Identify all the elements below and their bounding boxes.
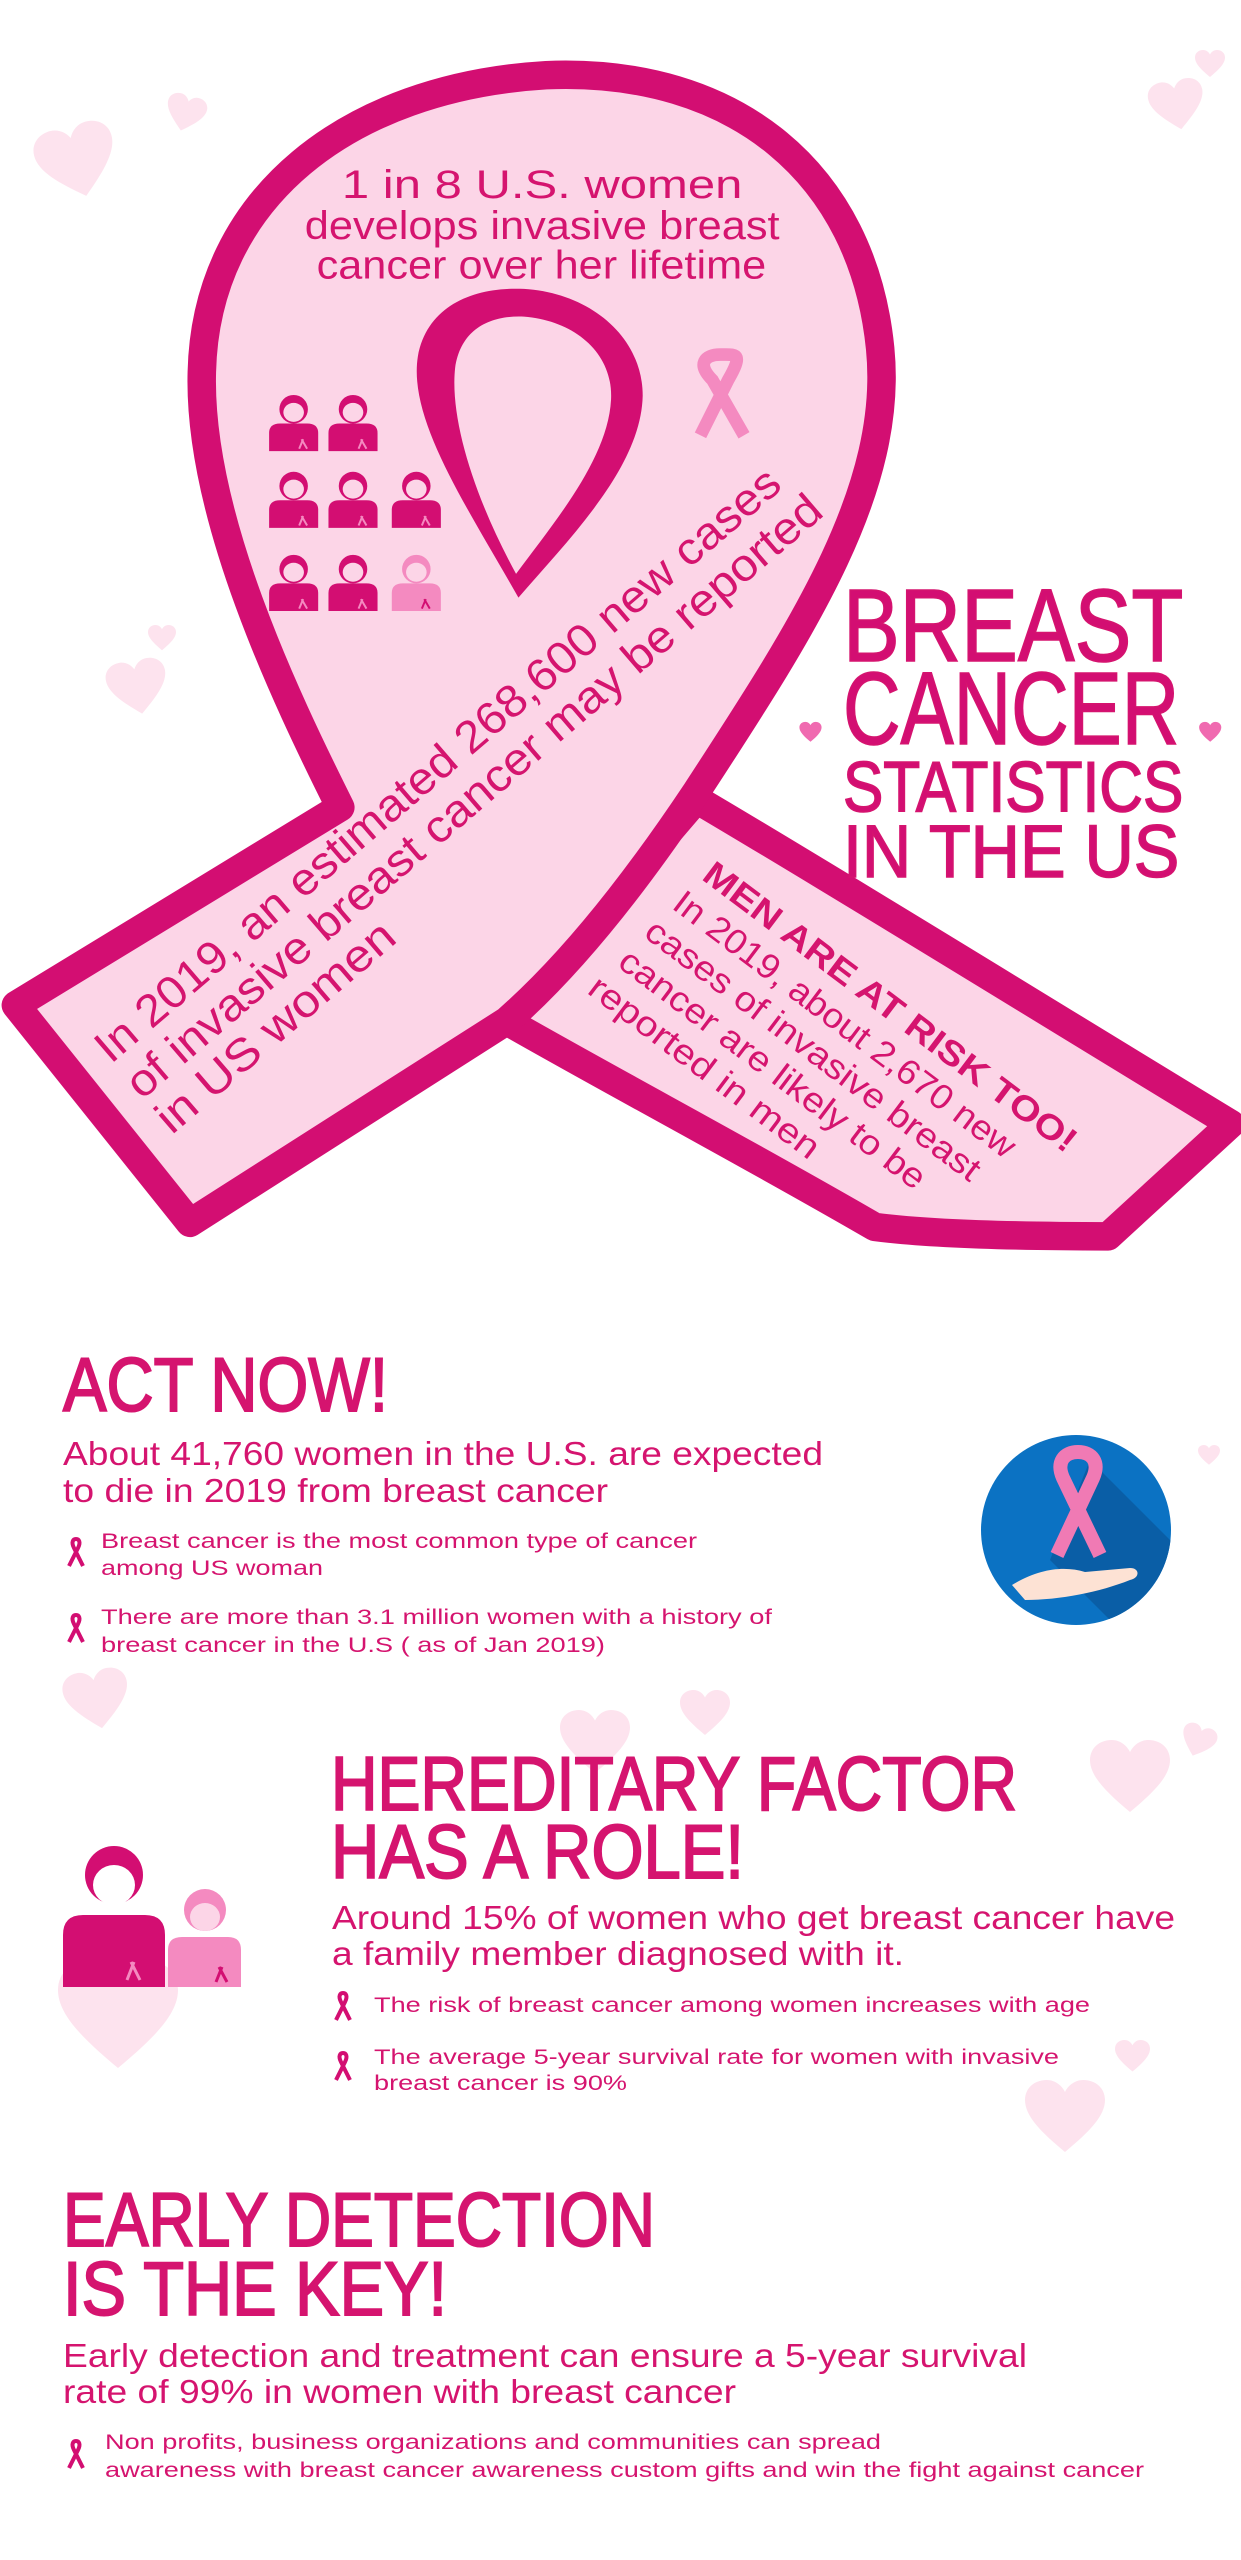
text: men are at risk too: MEN ARE AT RISK TOO!: [696, 854, 1084, 1160]
bullet: spread awareness: Non profits, business organizations and communities can spread: [105, 2431, 881, 2454]
heading: early detection: EARLY DETECTION: [63, 2178, 655, 2263]
ribbon: loop and left tail: [16, 75, 882, 1223]
title: [799, 568, 1221, 893]
ribbon infographic: [16, 75, 1231, 1288]
icon: hand holding ribbon: [981, 1435, 1171, 1625]
heading: early detection: IS THE KEY!: [63, 2247, 447, 2332]
bullet: 90% survival: The average 5-year survival rate for women with invasive: [374, 2046, 1059, 2069]
text: 268,600 new cases: In 2019, an estimated 268,600 new cases: [84, 457, 790, 1072]
bullet: 90% survival: [336, 2046, 1059, 2095]
bullet: risk increases with age: [336, 1993, 1090, 2020]
text: 41,760 women: to die in 2019 from breast cancer: [63, 1472, 608, 1509]
text: 99% survival: [63, 2337, 1027, 2410]
text: men are at risk too: In 2019, about 2,670 new: [666, 883, 1024, 1167]
bullet: 3.1 million: [69, 1606, 772, 1657]
background hearts: [29, 50, 1225, 2152]
bullet: most common type: Breast cancer is the most common type of cancer: [101, 1530, 697, 1553]
heading: early detection: [63, 2178, 655, 2332]
text: 41,760 women: [63, 1435, 823, 1509]
text: 15% of women: Around 15% of women who get breast cancer have: [332, 1899, 1175, 1936]
heading: act now: ACT NOW!: [63, 1343, 388, 1428]
heading: hereditary factor: [331, 1742, 1017, 1895]
text: 41,760 women: About 41,760 women in the U.S. are expected: [63, 1435, 823, 1472]
text: 15% of women: a family member diagnosed with it.: [332, 1935, 904, 1972]
title: STATISTICS: [843, 748, 1183, 827]
text: 268,600 new cases: of invasive breast cancer may be reported: [115, 483, 832, 1108]
ribbon: inner loop curve: [417, 289, 643, 598]
heading: hereditary factor: HEREDITARY FACTOR: [331, 1742, 1017, 1827]
bullet: 3.1 million: There are more than 3.1 million women with a history of: [101, 1606, 772, 1629]
bullet: risk increases with age: The risk of breast cancer among women increases with age: [374, 1994, 1090, 2017]
bullet: spread awareness: awareness with breast cancer awareness custom gifts and win the fight against cancer: [105, 2459, 1144, 2482]
text: 1 in 8 women: 1 in 8 U.S. women: [342, 163, 742, 207]
text: men are at risk too: [581, 840, 1084, 1288]
title: IN THE US: [843, 810, 1179, 893]
text: 268,600 new cases: in US women: [145, 910, 405, 1143]
text: 99% survival: rate of 99% in women with breast cancer: [63, 2373, 736, 2410]
text: men are at risk too: reported in men: [581, 968, 828, 1167]
text: 99% survival: Early detection and treatment can ensure a 5-year survival: [63, 2337, 1027, 2374]
icon: mother and daughter: [63, 1846, 241, 1987]
text: 1 in 8 women: develops invasive breast: [305, 204, 780, 248]
bullet: most common type: [69, 1530, 697, 1580]
text: men are at risk too: cases of invasive breast: [638, 911, 989, 1189]
section: hereditary factor: [63, 1742, 1175, 2095]
text: 1 in 8 women: [305, 163, 780, 288]
bullet: 90% survival: breast cancer is 90%: [374, 2072, 627, 2095]
section: act now: [63, 1343, 1200, 1657]
icon: small pink ribbon: [700, 355, 744, 435]
bullet: 3.1 million: breast cancer in the U.S ( as of Jan 2019): [101, 1634, 605, 1657]
text: 1 in 8 women: cancer over her lifetime: [317, 244, 766, 288]
ribbon: right tail: [507, 799, 1231, 1236]
section: early detection: [63, 2178, 1144, 2482]
bullet: most common type: among US woman: [101, 1557, 323, 1580]
text: 15% of women: [332, 1899, 1175, 1972]
bullet: spread awareness: [69, 2431, 1144, 2482]
heading: hereditary factor: HAS A ROLE!: [331, 1810, 744, 1895]
text: men are at risk too: cancer are likely to be: [611, 941, 934, 1197]
icon: 8 women grid: [269, 395, 441, 611]
